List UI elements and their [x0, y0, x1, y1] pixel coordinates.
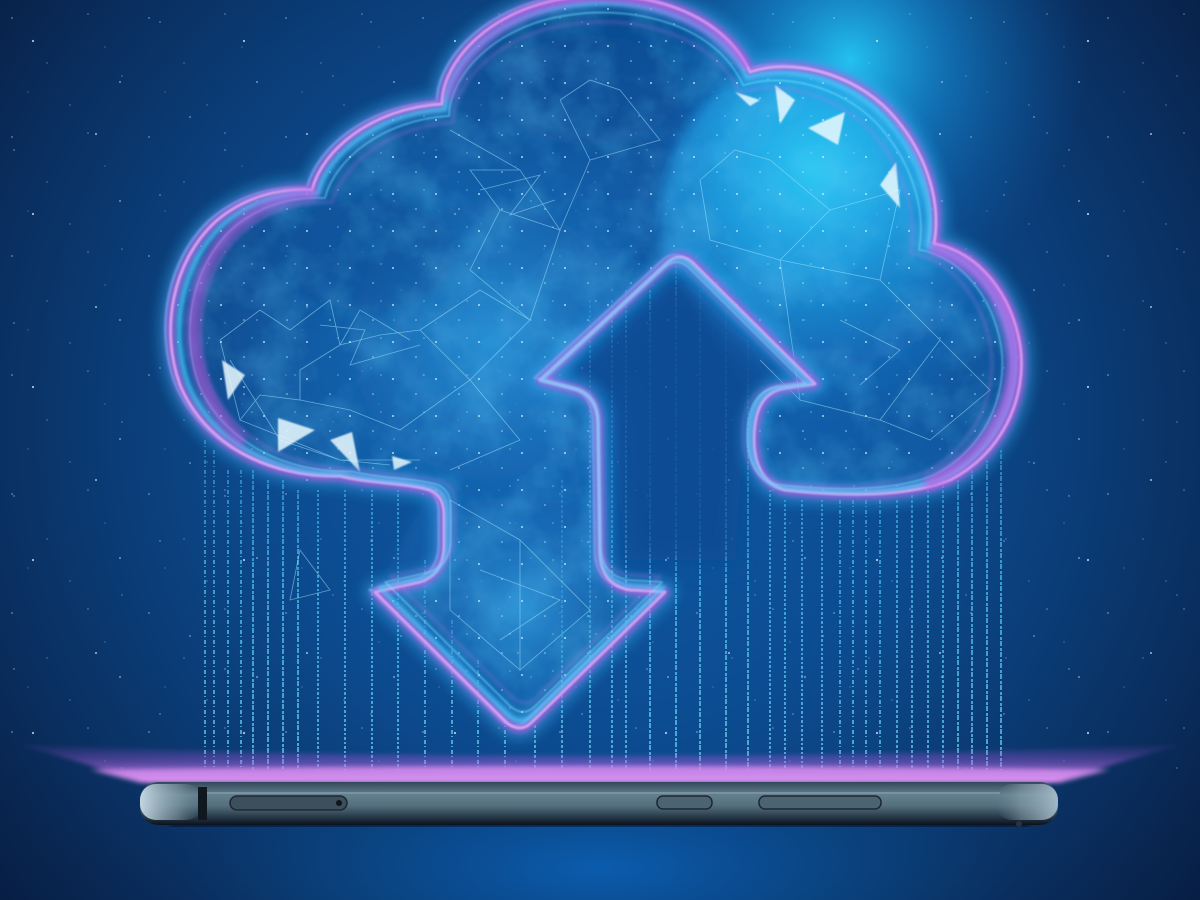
outline: second inner echo: [190, 13, 1002, 712]
right lobe: magenta accent ring: [930, 250, 1013, 482]
outline: magenta band: [171, 0, 1021, 728]
volume button: [759, 796, 881, 809]
left lobe: dark centre: [285, 200, 455, 310]
phone: side view: [140, 782, 1058, 827]
phone right end highlight: [996, 784, 1058, 820]
bottom port: [1016, 821, 1022, 827]
top lobe: dark centre: [500, 35, 680, 145]
cloud nebula: mottled texture: [160, 0, 1030, 740]
phone left end highlight: [140, 784, 202, 820]
antenna band: [198, 787, 207, 820]
cloud: translucent body: [160, 0, 1030, 740]
arrow up: darker interior: [565, 275, 790, 560]
sim tray: [230, 796, 347, 810]
cloud nodes: sparkle dots: [171, 0, 1021, 728]
horizon: purple light band above phone: [10, 743, 1190, 783]
outline: offset cyan echo: [166, 0, 1016, 726]
glow: lower floor: [0, 780, 1200, 900]
outline: third inner echo: [201, 22, 992, 703]
phone shadow: [170, 818, 1030, 826]
down arrow: inner glow: [375, 500, 665, 730]
outline: pale pink core: [171, 0, 1021, 728]
cloud and arrows outline: neon strokes: [166, 0, 1021, 728]
phone body: [140, 782, 1058, 825]
outline: cyan inner echo: [179, 3, 1013, 721]
left lobe: magenta accent ring: [193, 194, 312, 440]
phone top highlight: [205, 792, 1000, 794]
power button: [657, 796, 712, 809]
data streams: falling binary rain: [205, 265, 1001, 770]
outline: outer glow: [171, 0, 1021, 728]
glow: top right cyan light: [560, 0, 1140, 330]
top lobe: magenta accent arc: [450, 0, 745, 95]
network mesh: plexus lines: [220, 80, 990, 670]
white facets: light shards: [222, 85, 900, 472]
